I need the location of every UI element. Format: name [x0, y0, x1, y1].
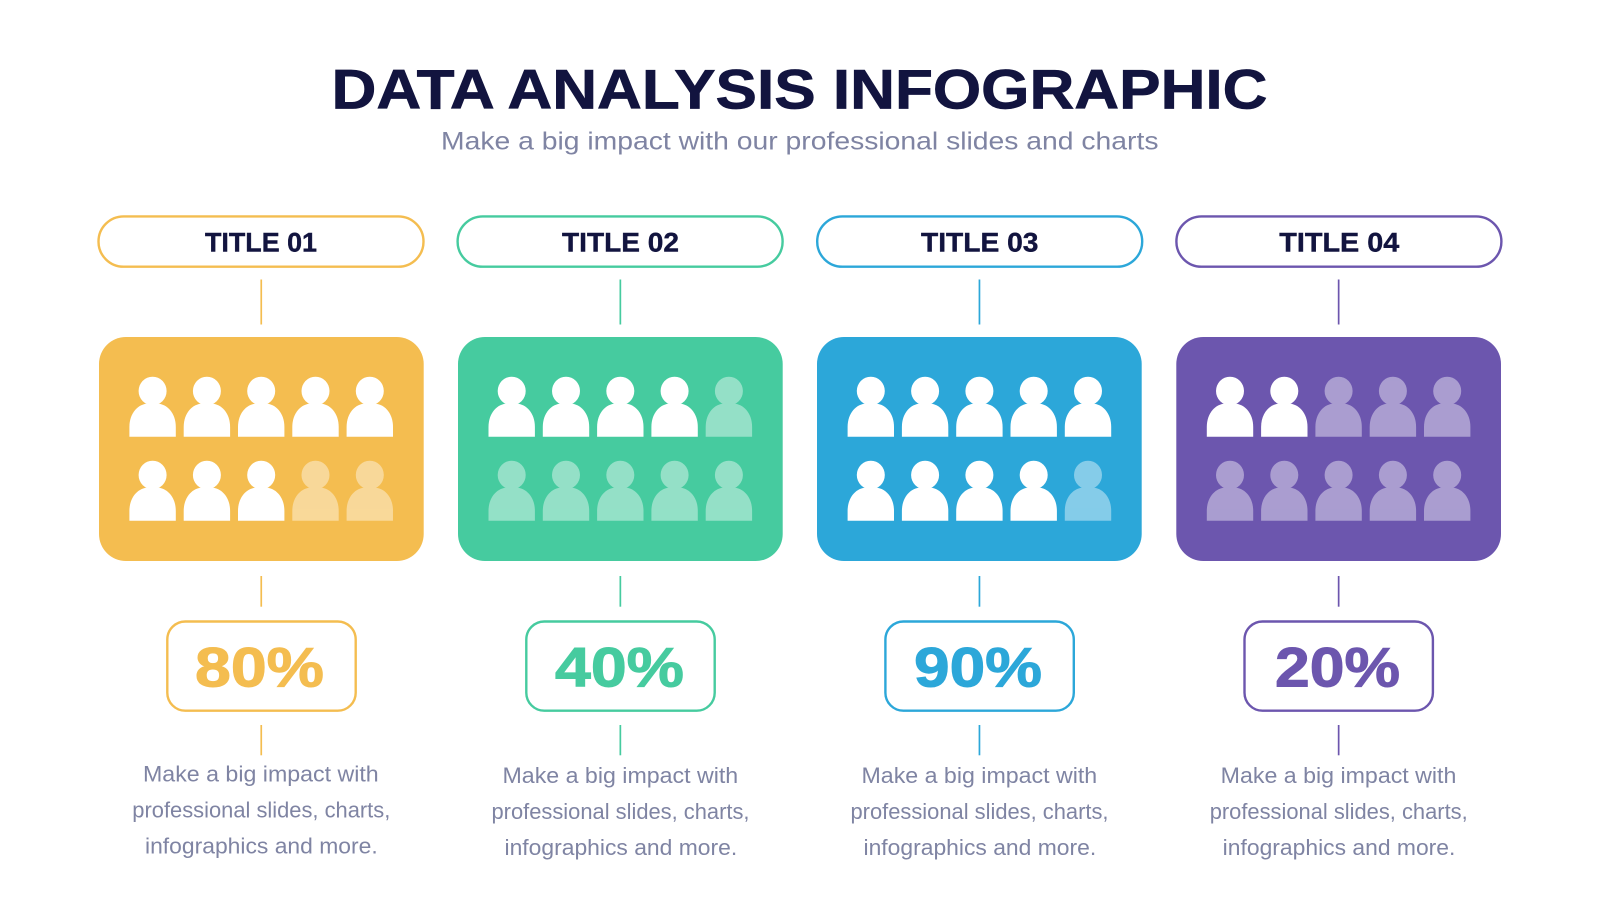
title pill 04	[1176, 216, 1501, 267]
people card 02: 4 of 10 highlighted	[458, 337, 783, 561]
panel: column 03	[817, 216, 1142, 860]
description 02: professional slides, charts,	[492, 799, 750, 824]
description 02: infographics and more.	[504, 835, 737, 860]
description 01: Make a big impact with	[143, 762, 379, 787]
description 03: infographics and more.	[864, 835, 1096, 860]
title pill 03: TITLE 03	[921, 228, 1038, 258]
people card 01: 8 of 10 highlighted	[99, 337, 424, 561]
people card 03: 9 of 10 highlighted	[817, 337, 1142, 561]
description 01: infographics and more.	[145, 834, 378, 859]
title pill 02: TITLE 02	[562, 228, 679, 258]
value box 20%	[1244, 622, 1433, 711]
description 02: Make a big impact with	[502, 763, 738, 788]
value box 90%	[885, 622, 1074, 711]
panel: column 02	[458, 216, 783, 860]
description 04: Make a big impact with	[1221, 763, 1456, 788]
description 04	[1210, 763, 1468, 860]
title: DATA ANALYSIS INFOGRAPHIC	[332, 58, 1268, 121]
description 04: professional slides, charts,	[1210, 799, 1468, 824]
value box 40%	[526, 622, 715, 711]
description 03: professional slides, charts,	[850, 799, 1108, 824]
description 03	[850, 763, 1108, 860]
value box 90%: 90%	[914, 635, 1042, 698]
value box 80%	[167, 622, 356, 711]
description 03: Make a big impact with	[862, 763, 1097, 788]
description 04: infographics and more.	[1223, 835, 1455, 860]
description 01	[132, 762, 390, 859]
title pill 01	[98, 216, 424, 267]
panel: column 04	[1176, 216, 1501, 860]
value box 80%: 80%	[195, 635, 324, 698]
value box 20%: 20%	[1275, 635, 1400, 698]
title pill 02	[458, 216, 783, 267]
panel: column 01	[98, 216, 424, 859]
description 02	[492, 763, 750, 860]
title pill 03	[817, 216, 1142, 267]
value box 40%: 40%	[555, 635, 684, 698]
title pill 04: TITLE 04	[1279, 228, 1400, 258]
title pill 01: TITLE 01	[205, 228, 317, 258]
people card 04: 2 of 10 highlighted	[1176, 337, 1501, 561]
subtitle: Make a big impact with our professional slides and charts	[441, 128, 1158, 155]
description 01: professional slides, charts,	[132, 798, 390, 823]
